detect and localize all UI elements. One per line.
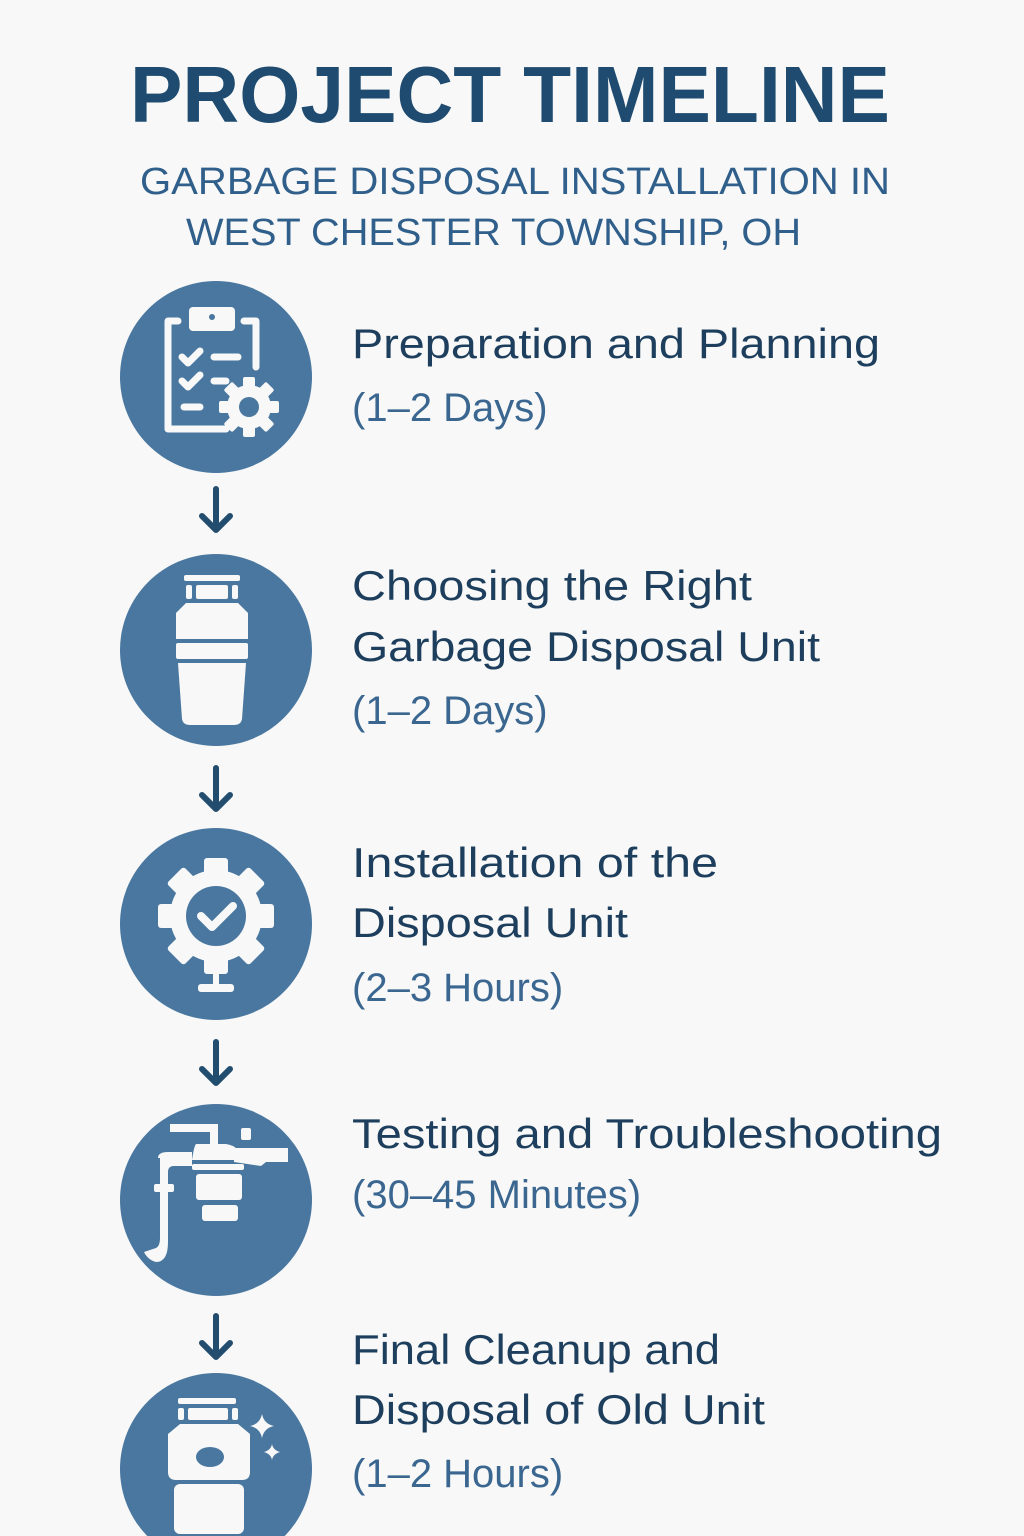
text: step 3: Installation of the (352, 839, 718, 886)
text: step 5: Final Cleanup and (352, 1326, 720, 1373)
icon: gear with check (120, 828, 312, 1020)
text: step 4 (352, 1110, 942, 1217)
icon: plumbing with disposal (120, 1104, 312, 1296)
text: step 1: (1–2 Days) (352, 386, 548, 430)
text: step 3: Disposal Unit (352, 899, 628, 946)
step 4: testing (120, 1104, 942, 1296)
step 3: installation (120, 828, 718, 1020)
text: step 2: Garbage Disposal Unit (352, 623, 820, 670)
title: PROJECT TIMELINE (130, 50, 890, 139)
text: step 3: (2–3 Hours) (352, 966, 563, 1010)
step 1: preparation (120, 281, 880, 473)
subtitle: GARBAGE DISPOSAL INSTALLATION IN (140, 161, 890, 203)
text: step 1 (352, 320, 880, 430)
arrow 1 (202, 489, 230, 530)
text: step 4: Testing and Troubleshooting (352, 1110, 942, 1157)
arrow 2 (202, 768, 230, 809)
text: step 2: Choosing the Right (352, 562, 752, 609)
subtitle (140, 161, 890, 254)
arrow 4 (202, 1316, 230, 1357)
text: step 2: (1–2 Days) (352, 689, 548, 733)
text: step 5: Disposal of Old Unit (352, 1386, 765, 1433)
icon: clipboard with gear (120, 281, 312, 473)
text: step 4: (30–45 Minutes) (352, 1173, 641, 1217)
step 5: cleanup (120, 1326, 765, 1536)
text: step 1: Preparation and Planning (352, 320, 880, 367)
arrow 3 (202, 1042, 230, 1083)
icon: disposal with sparkles (120, 1373, 312, 1536)
icon: disposal unit (120, 554, 312, 746)
step 2: choosing unit (120, 554, 820, 746)
subtitle: WEST CHESTER TOWNSHIP, OH (186, 212, 801, 254)
text: step 2 (352, 562, 820, 733)
text: step 5: (1–2 Hours) (352, 1452, 563, 1496)
text: step 5 (352, 1326, 765, 1496)
text: step 3 (352, 839, 718, 1010)
